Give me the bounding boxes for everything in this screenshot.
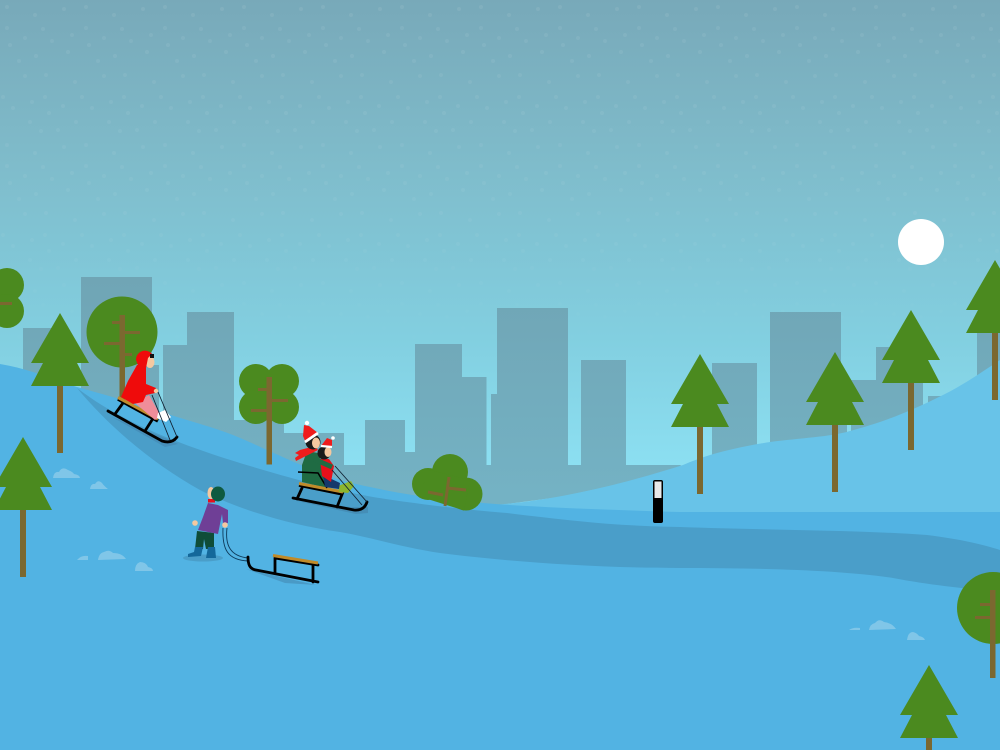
bush bbox=[412, 454, 482, 510]
round tree: behind red rider bbox=[86, 296, 158, 400]
child pulling empty sled bbox=[183, 486, 318, 585]
round tree: right edge bbox=[957, 572, 1000, 678]
boots bbox=[188, 547, 203, 557]
shoe bbox=[157, 410, 171, 422]
sled frame bbox=[108, 403, 177, 442]
shadow bbox=[183, 554, 223, 562]
child coat bbox=[320, 459, 334, 482]
empty sled shadow bbox=[246, 569, 316, 585]
adult arm bbox=[314, 459, 332, 467]
face bbox=[208, 487, 214, 499]
rider in red on sled bbox=[108, 351, 178, 447]
coat bbox=[198, 503, 228, 534]
sled track bbox=[77, 388, 1000, 592]
adult hat bbox=[303, 425, 318, 443]
child trousers bbox=[323, 475, 340, 489]
sled frame bbox=[293, 488, 367, 510]
scarf bbox=[208, 499, 215, 502]
pull ropes bbox=[223, 528, 248, 561]
two riders in santa hats on sled bbox=[293, 421, 368, 514]
hat bbox=[211, 486, 225, 502]
steering ropes bbox=[332, 466, 367, 505]
sled seat bbox=[273, 556, 318, 563]
hands bbox=[192, 520, 198, 526]
foreground snow slope bbox=[0, 364, 1000, 750]
seat bbox=[118, 399, 158, 421]
trail marker post bbox=[653, 480, 663, 523]
background hill bbox=[470, 360, 1000, 520]
adult head bbox=[306, 434, 320, 450]
snow mounds left bbox=[53, 468, 153, 571]
hood bbox=[136, 351, 152, 368]
child hat bbox=[321, 438, 332, 447]
city skyline bbox=[23, 277, 1000, 505]
snow mounds right bbox=[849, 620, 925, 640]
trousers bbox=[195, 531, 214, 549]
sled shadow bbox=[297, 501, 368, 514]
falling snow pattern bbox=[5, 5, 984, 17]
pine tree: bottom right bbox=[900, 665, 958, 750]
empty sled bbox=[248, 557, 318, 582]
seat bbox=[299, 485, 343, 494]
child head bbox=[318, 446, 330, 460]
steering ropes bbox=[152, 392, 177, 440]
hand bbox=[154, 389, 158, 393]
hair bbox=[150, 354, 154, 358]
pine trees: right hill bbox=[671, 260, 1000, 494]
scarf bbox=[295, 446, 318, 461]
shoes bbox=[338, 481, 354, 493]
leg bbox=[135, 395, 161, 420]
pine tree: upper left bbox=[31, 313, 89, 453]
seat back bbox=[298, 472, 327, 488]
face bbox=[146, 356, 154, 368]
sky background bbox=[0, 0, 1000, 520]
coat bbox=[121, 365, 156, 404]
adult body bbox=[302, 451, 327, 488]
round tree: far left bbox=[0, 268, 24, 328]
sled shadow bbox=[112, 417, 178, 447]
four-lobed tree bbox=[239, 364, 299, 464]
moon bbox=[898, 219, 944, 265]
pine tree: lower left bbox=[0, 437, 52, 577]
